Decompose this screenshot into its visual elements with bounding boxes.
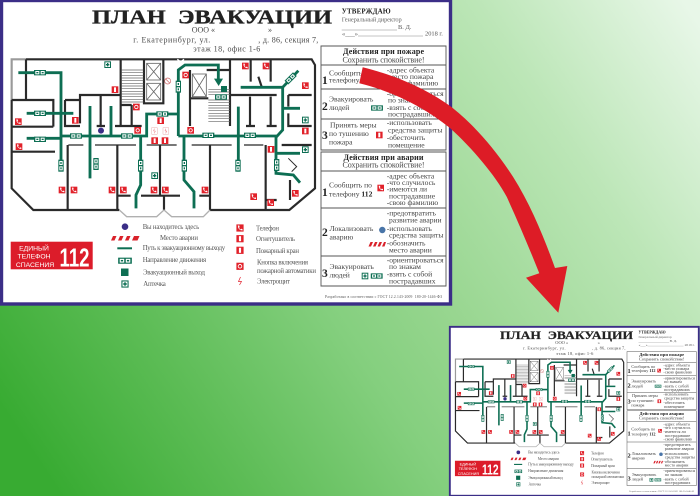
panel: fire actions: Сообщить по — [329, 68, 372, 77]
emergency phone box: ЕДИНЫЙ — [19, 244, 49, 252]
panel: fire actions: -свою фамилию — [387, 78, 439, 87]
panel: accident actions: 3 — [322, 268, 328, 280]
legend right column — [236, 224, 316, 286]
small legend left column: Место аварии — [538, 457, 559, 461]
small standards footnote: Разработано в соответствии с ГОСТ 12.2.143-2009 180-20-1446-ФЗ — [629, 490, 694, 493]
panel: fire actions: пострадавших — [388, 110, 435, 119]
small panel: fire actions: Сохранить спокойствие! — [639, 357, 684, 362]
small panel: fire actions: 2 — [628, 382, 631, 389]
legend right column: Пожарный кран — [256, 248, 299, 255]
small legend left column: Путь к эвакуационному выходу — [528, 462, 574, 466]
small legend left column: Направление движения — [528, 469, 564, 473]
small legend right column: Огнетушитель — [591, 457, 613, 461]
title: ПЛАН ЭВАКУАЦИИ — [92, 6, 333, 28]
company and address: этаж 18, офис 1-6 — [193, 45, 260, 54]
small emergency phone box: ЕДИНЫЙ — [460, 463, 476, 467]
floor plan — [12, 59, 315, 217]
first aid icons — [104, 61, 309, 179]
panel: accident actions: пострадавшие — [389, 192, 436, 201]
small panel: fire actions: пострадавших — [664, 387, 691, 392]
small floor plan — [455, 359, 624, 447]
legend right column: Электрощит — [257, 278, 290, 286]
panel: accident actions — [321, 152, 446, 286]
legend right column: Огнетушитель — [256, 236, 295, 243]
legend left column: Путь к эвакуационному выходу — [143, 245, 226, 252]
legend left column: Направление движения — [143, 257, 206, 264]
small emergency phone box — [455, 461, 500, 479]
small emergency phone box: 112 — [482, 463, 499, 479]
small panel: accident actions: место аварии — [665, 463, 689, 468]
small panel: accident actions: 2 — [628, 453, 631, 460]
emergency phone box: СПАСЕНИЯ — [16, 262, 54, 269]
legend right column: Телефон — [256, 226, 279, 232]
small panel: accident actions: пострадавшие — [665, 433, 690, 438]
panel: fire actions: 2 — [322, 101, 328, 113]
small company and address: ООО « — [555, 340, 569, 345]
small panel: accident actions: -что случилось — [663, 425, 690, 430]
small panel: accident actions: телефону 112 — [631, 432, 655, 437]
small legend right column: Кнопка включения — [592, 470, 620, 474]
panel: fire actions: средства защиты — [388, 125, 442, 134]
small panel: fire actions: Действия при пожаре — [639, 352, 684, 357]
panel: accident actions: место аварии — [389, 245, 432, 254]
alarm button icons — [133, 72, 194, 134]
panel: accident actions: -адрес объекта — [387, 171, 435, 180]
panel: accident actions: Сообщить по — [329, 180, 372, 189]
extinguisher icons — [72, 86, 309, 153]
small approval block: В. Д. — [670, 339, 677, 343]
small panel: fire actions: Сообщить по — [631, 364, 655, 369]
small panel: accident actions: 3 — [628, 475, 631, 482]
legend left column: Место аварии — [160, 235, 198, 242]
small legend left column: Вы находитесь здесь — [528, 451, 560, 455]
small panel: accident actions: -свою фамилию — [663, 436, 692, 441]
bay windows — [119, 210, 210, 217]
electrical panels — [152, 128, 169, 134]
legend right column: пожарной автоматики — [257, 268, 316, 275]
small panel: accident actions: средства защиты — [665, 455, 695, 460]
panel: accident actions: телефону 112 — [329, 190, 373, 199]
panel: fire actions: 3 — [322, 130, 328, 142]
legend right column: Кнопка включения — [257, 260, 308, 266]
standards footnote: Разработано в соответствии с ГОСТ 12.2.143-2009 180-20-1446-ФЗ — [325, 295, 442, 299]
panel: fire actions: телефону 112 — [329, 76, 373, 85]
route arrow head — [214, 79, 223, 86]
small emergency phone box: СПАСЕНИЯ — [458, 472, 479, 476]
small panel: accident actions: пострадавших — [665, 480, 691, 485]
panel: accident actions: Сохранить спокойствие! — [342, 160, 424, 169]
panel: fire actions: Действия при пожаре — [343, 47, 424, 56]
panel: fire actions: людей — [329, 103, 349, 112]
small approval block: УТВЕРЖДАЮ — [638, 330, 666, 334]
small panel: accident actions: людей — [632, 477, 644, 482]
small approval block — [638, 330, 695, 347]
small legend right column: Пожарный кран — [591, 464, 615, 468]
panel: fire actions: -адрес объекта — [387, 65, 435, 74]
approval block: УТВЕРЖДАЮ — [342, 7, 391, 15]
arrow: large plan to small plan — [359, 67, 567, 313]
company and address: » — [268, 26, 272, 35]
small panel: accident actions: Эвакуировать — [632, 472, 656, 477]
small panel: accident actions: -взять с собой — [663, 476, 689, 481]
panel: accident actions: пострадавших — [389, 276, 436, 285]
elevators and stairs — [122, 63, 230, 121]
small legend right column: Телефон — [591, 451, 604, 456]
telephone icons — [15, 63, 309, 206]
panel: accident actions: -использовать — [387, 224, 432, 233]
small approval block: 2018 г. — [685, 343, 695, 347]
small panel: accident actions: -предотвратить — [663, 442, 691, 447]
panel: fire actions — [321, 46, 446, 150]
panel: accident actions: Эвакуировать — [330, 262, 374, 271]
panel: accident actions: аварию — [330, 232, 354, 241]
legend left column: Вы находитесь здесь — [143, 224, 199, 231]
small panel: fire actions — [627, 352, 696, 410]
panel: fire actions: по знакам — [388, 95, 420, 104]
panel: accident actions: -предотвратить — [387, 209, 436, 218]
small panel: fire actions: -ориентироваться — [663, 376, 695, 381]
panel: accident actions: -имеются ли — [387, 185, 427, 194]
small panel: fire actions: средства защиты — [664, 396, 694, 401]
small poster frame — [450, 327, 699, 496]
poster frame — [2, 0, 450, 304]
small panel: fire actions: людей — [631, 383, 643, 388]
panel: fire actions: пожара — [329, 137, 353, 146]
small approval block: Генеральный директор — [638, 335, 672, 339]
building walls — [12, 59, 315, 210]
panel: fire actions: -место пожара — [387, 72, 434, 81]
small panel: accident actions: Сообщить по — [631, 426, 655, 431]
panel: fire actions: Эвакуировать — [329, 95, 374, 104]
approval block: «___» — [342, 30, 358, 38]
panel: fire actions: -обесточить — [387, 133, 426, 142]
small legend right column: Электрощит — [592, 481, 610, 485]
panel: accident actions: -взять с собой — [387, 270, 432, 279]
small approval block: «___» — [639, 343, 648, 347]
small panel: fire actions: -взять с собой — [663, 383, 689, 388]
small legend left column — [511, 451, 574, 486]
small panel: fire actions: -адрес объекта — [663, 362, 690, 367]
panel: fire actions: 1 — [322, 75, 328, 87]
company and address — [133, 26, 318, 54]
small legend right column — [580, 451, 624, 485]
small panel: fire actions: телефону 112 — [631, 368, 655, 373]
poster: large evacuation plan — [2, 0, 450, 304]
panel: fire actions: -ориентироваться — [387, 89, 444, 98]
no-elevator sign — [165, 78, 171, 84]
panel: fire actions: Принять меры — [330, 121, 377, 130]
small panel: accident actions: по знакам — [665, 472, 683, 477]
panel: fire actions: помещение — [388, 140, 425, 149]
small panel: fire actions: по знакам — [664, 379, 682, 384]
panel: accident actions: по знакам — [389, 262, 421, 271]
small panel: accident actions: Действия при аварии — [639, 411, 684, 416]
panel: accident actions: развитие аварии — [389, 216, 442, 225]
small title: ПЛАН ЭВАКУАЦИИ — [500, 330, 634, 342]
small panel: fire actions: -обесточить — [663, 400, 685, 405]
small panel: accident actions: Локализовать — [632, 451, 656, 456]
small company and address — [523, 340, 625, 357]
small panel: fire actions: по тушению — [631, 398, 653, 403]
legend left column — [111, 223, 226, 288]
small panel: fire actions: 3 — [628, 398, 631, 405]
panel: fire actions: -взять с собой — [387, 103, 432, 112]
small panel: fire actions: пожара — [631, 402, 645, 407]
legend left column: Аптечка — [143, 281, 166, 288]
small panel: fire actions: -свою фамилию — [663, 370, 692, 375]
company and address: г. Екатеринбург, ул. — [133, 35, 210, 44]
small emergency phone box: ТЕЛЕФОН — [459, 467, 477, 471]
emergency phone box — [11, 242, 93, 273]
evacuation routes — [18, 65, 300, 208]
panel: fire actions: Сохранить спокойствие! — [342, 55, 424, 64]
small panel: fire actions: Принять меры — [632, 393, 658, 398]
approval block: Генеральный директор — [342, 17, 402, 24]
panel: accident actions: Действия при аварии — [344, 153, 424, 162]
small panel: fire actions: Эвакуировать — [631, 379, 656, 384]
approval block: 2018 г. — [425, 30, 443, 38]
small legend right column: пожарной автоматики — [592, 475, 624, 479]
small panel: fire actions: помещение — [664, 404, 685, 409]
small company and address: » — [598, 340, 600, 345]
small panel: accident actions: -использовать — [663, 451, 689, 456]
approval block — [342, 7, 443, 38]
panel: accident actions: Локализовать — [330, 224, 374, 233]
panel: accident actions: -ориентироваться — [387, 255, 444, 264]
small panel: accident actions: -обозначить — [663, 459, 685, 464]
small panel: accident actions — [627, 411, 696, 485]
company and address: ООО « — [192, 26, 215, 35]
company and address: , д. 86, секция 7, — [258, 35, 318, 44]
approval block: В. Д. — [398, 24, 412, 31]
emergency phone box: ТЕЛЕФОН — [17, 254, 51, 260]
you are here dot — [98, 128, 104, 134]
small panel: accident actions: Сохранить спокойствие! — [639, 415, 684, 420]
small panel: accident actions: 1 — [628, 430, 631, 437]
panel: accident actions: людей — [330, 270, 350, 279]
panel: accident actions: средства защиты — [389, 231, 443, 240]
poster: small copy of the plan — [450, 327, 699, 496]
panel: accident actions: -свою фамилию — [387, 198, 439, 207]
emergency phone box: 112 — [60, 243, 90, 273]
small company and address: , д. 86, секция 7, — [592, 346, 625, 352]
panel: accident actions: 2 — [322, 227, 328, 239]
direction signs — [34, 70, 297, 172]
small panel: accident actions: -адрес объекта — [663, 421, 690, 426]
panel: accident actions: -обозначить — [387, 239, 426, 248]
small panel: accident actions: -имеются ли — [663, 429, 687, 434]
panel: accident actions: 1 — [322, 187, 328, 199]
small panel: fire actions: -использовать — [663, 392, 689, 397]
panel: accident actions: -что случилось — [387, 178, 436, 187]
small panel: fire actions: 1 — [628, 368, 631, 375]
small panel: fire actions: -место пожара — [663, 366, 689, 371]
small company and address: г. Екатеринбург, ул. — [523, 346, 566, 352]
exit icon — [221, 86, 227, 92]
panel: fire actions: по тушению — [329, 129, 369, 138]
small panel: accident actions: -ориентироваться — [663, 468, 695, 473]
small panel: accident actions: аварию — [632, 455, 645, 460]
small panel: accident actions: развитие аварии — [665, 446, 695, 451]
small company and address: этаж 18, офис 1-6 — [556, 351, 594, 357]
panel: fire actions: -использовать — [387, 118, 432, 127]
legend left column: Эвакуационный выход — [143, 270, 206, 276]
small legend left column: Эвакуационный выход — [528, 476, 563, 480]
small legend left column: Аптечка — [528, 482, 541, 486]
